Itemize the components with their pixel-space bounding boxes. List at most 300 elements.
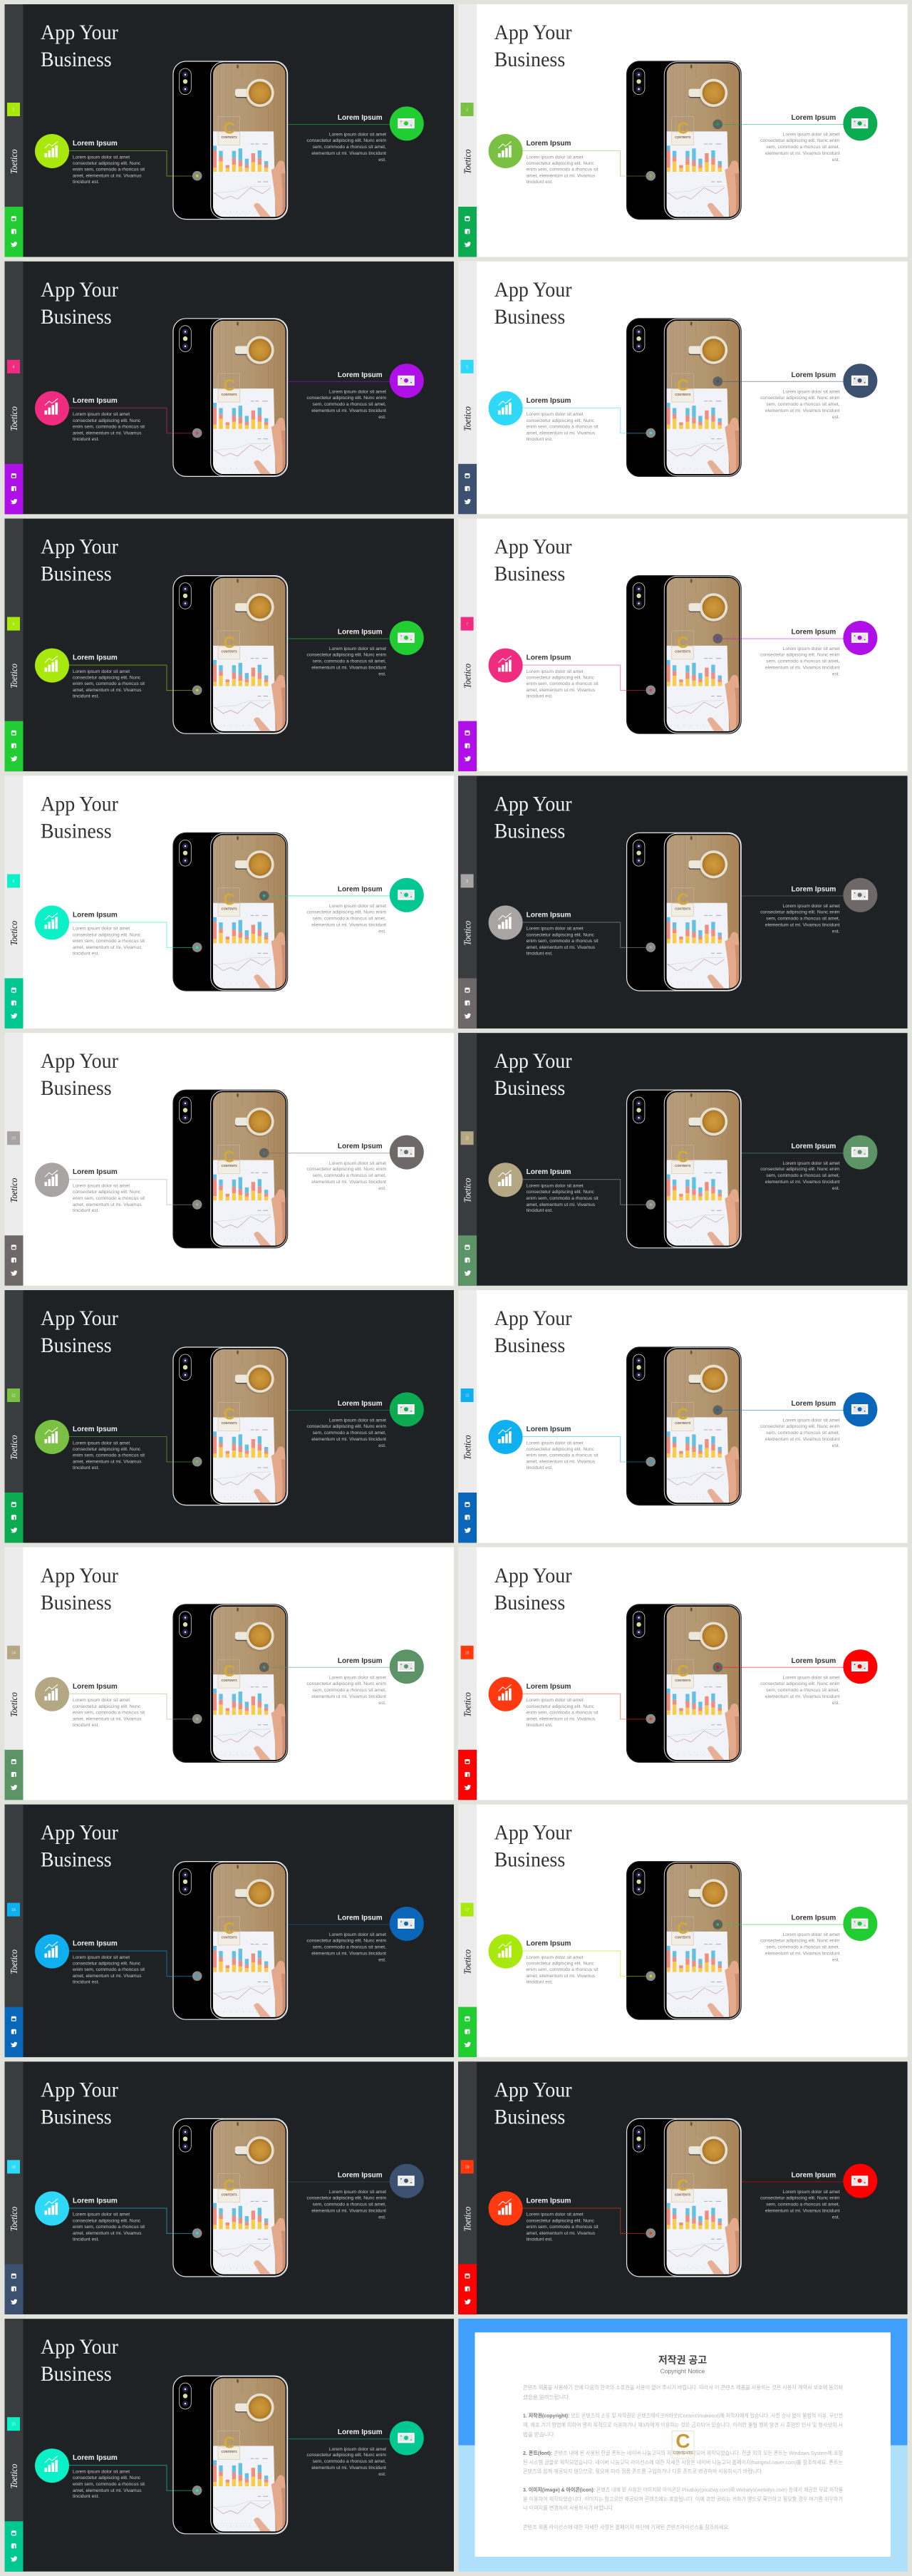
- icon: money circle: [390, 1907, 424, 1941]
- sidebar with page number and brand: 16: [11, 1908, 16, 1912]
- left text: tincidunt est.: [527, 437, 553, 442]
- left text: consectetur adipiscing elit. Nunc: [527, 1447, 595, 1452]
- right connector and hotspot: [712, 1920, 844, 1930]
- right connector and hotspot: [259, 1148, 390, 1158]
- left connector and hotspot: [523, 665, 656, 695]
- left text: amet, elementum ut mi. Vivamus: [73, 1716, 142, 1721]
- left text: tincidunt est.: [527, 1980, 553, 1985]
- social icons: [458, 978, 477, 1029]
- icon: money circle: [843, 878, 877, 912]
- right heading: Lorem Ipsum: [792, 1657, 836, 1665]
- right text: consectetur adipiscing elit. Nunc enim: [307, 396, 386, 401]
- title: Business: [494, 1334, 565, 1357]
- right text: Lorem ipsum dolor sit amet: [329, 1161, 386, 1166]
- left connector and hotspot: [69, 665, 202, 695]
- phone with photo: [627, 833, 741, 991]
- title: Business: [41, 1077, 112, 1100]
- right text: Lorem ipsum dolor sit amet: [783, 1675, 840, 1680]
- slide 8: light, teal: [4, 776, 454, 1029]
- left text: consectetur adipiscing elit. Nunc: [527, 932, 595, 937]
- left text: consectetur adipiscing elit. Nunc: [527, 676, 595, 681]
- left text: amet, elementum ut mi. Vivamus: [527, 945, 596, 950]
- right text: est.: [378, 1958, 386, 1963]
- panel background: [4, 519, 454, 771]
- left text: enim sem, commodo a rhoncus sit: [527, 1196, 598, 1201]
- icon: money circle: [843, 1907, 877, 1941]
- right connector and hotspot: [712, 120, 844, 129]
- right heading: Lorem Ipsum: [338, 2428, 383, 2436]
- sidebar with page number and brand: Toetico: [8, 1435, 19, 1460]
- title: App Your: [494, 1821, 572, 1845]
- title: App Your: [41, 793, 118, 816]
- right text: sem, commodo a rhoncus sit amet,: [766, 145, 840, 150]
- phone with photo: [627, 2118, 741, 2277]
- sidebar with page number and brand: 17: [465, 1908, 470, 1912]
- panel background: [458, 4, 908, 257]
- slide 5: light, cyan and slate: [458, 262, 908, 514]
- gold logo watermark: CONTENTS: [673, 2451, 693, 2456]
- right text: consectetur adipiscing elit. Nunc enim: [307, 1681, 386, 1686]
- right text: elementum ut mi. Vivamus tincidunt: [311, 922, 386, 927]
- left text: amet, elementum ut mi. Vivamus: [527, 174, 596, 179]
- social icons: [458, 1493, 477, 1542]
- title: Business: [41, 1848, 112, 1872]
- sidebar with page number and brand: 20: [11, 2423, 16, 2427]
- right connector: [288, 381, 390, 382]
- phone with photo: [627, 319, 741, 476]
- left heading: Lorem Ipsum: [73, 397, 118, 405]
- icon: money circle: [843, 1649, 877, 1684]
- left connector and hotspot: [69, 2466, 202, 2495]
- slide 4: dark, pink and purple: [4, 262, 454, 514]
- title: App Your: [494, 1307, 572, 1330]
- left text: Lorem ipsum dolor sit amet: [73, 1698, 130, 1703]
- right text: est.: [832, 2215, 840, 2220]
- right text: est.: [832, 1443, 840, 1448]
- title: Business: [494, 1077, 565, 1100]
- sidebar with page number and brand: Toetico: [8, 2463, 19, 2488]
- right text: consectetur adipiscing elit. Nunc enim: [760, 653, 840, 658]
- sidebar with page number and brand: Toetico: [8, 1949, 19, 1974]
- sidebar with page number and brand: Toetico: [462, 1178, 473, 1202]
- left connector and hotspot: [69, 1437, 202, 1467]
- right heading: Lorem Ipsum: [792, 1400, 836, 1408]
- panel background: [4, 2319, 454, 2572]
- right text: consectetur adipiscing elit. Nunc enim: [307, 1167, 386, 1172]
- slide 20: dark, teal: [4, 2319, 454, 2572]
- sidebar with page number and brand: [458, 1547, 477, 1750]
- sidebar with page number and brand: 9: [466, 880, 468, 884]
- panel background: [458, 519, 908, 771]
- right text: elementum ut mi. Vivamus tincidunt: [765, 666, 840, 671]
- sidebar with page number and brand: 5: [466, 365, 468, 369]
- icon: chart circle: [35, 905, 69, 939]
- left connector and hotspot: [69, 151, 202, 181]
- sidebar with page number and brand: Toetico: [462, 920, 473, 945]
- sidebar with page number and brand: 3: [466, 108, 468, 113]
- left heading: Lorem Ipsum: [73, 140, 118, 148]
- phone with photo: [627, 576, 741, 733]
- right connector: [742, 895, 844, 897]
- left connector and hotspot: [69, 2208, 202, 2238]
- sidebar with page number and brand: Toetico: [462, 1692, 473, 1717]
- panel background: [4, 1805, 454, 2057]
- right heading: Lorem Ipsum: [338, 114, 383, 122]
- right text: sem, commodo a rhoncus sit amet,: [766, 659, 840, 664]
- right connector and hotspot: [712, 634, 844, 644]
- left text: tincidunt est.: [73, 951, 99, 956]
- icon: chart circle: [35, 1163, 69, 1197]
- icon: chart circle: [489, 1163, 523, 1197]
- left text: consectetur adipiscing elit. Nunc: [73, 418, 141, 423]
- right heading: Lorem Ipsum: [792, 885, 836, 893]
- right heading: Lorem Ipsum: [338, 371, 383, 379]
- right text: est.: [378, 1186, 386, 1191]
- right text: Lorem ipsum dolor sit amet: [783, 133, 840, 138]
- left text: amet, elementum ut mi. Vivamus: [73, 688, 142, 693]
- left text: Lorem ipsum dolor sit amet: [527, 927, 584, 932]
- left text: consectetur adipiscing elit. Nunc: [527, 1704, 595, 1709]
- sidebar with page number and brand: [4, 1805, 23, 2007]
- left connector and hotspot: [523, 1694, 656, 1724]
- phone with photo: [627, 1862, 741, 2019]
- icon: money circle: [390, 621, 424, 655]
- left text: consectetur adipiscing elit. Nunc: [527, 2218, 595, 2223]
- sidebar with page number and brand: 15: [465, 1651, 470, 1655]
- icon: chart circle: [35, 649, 69, 683]
- left text: tincidunt est.: [73, 1208, 99, 1213]
- sidebar with page number and brand: [4, 776, 23, 978]
- right text: elementum ut mi. Vivamus tincidunt: [311, 666, 386, 671]
- phone with photo: [173, 2118, 288, 2277]
- right text: elementum ut mi. Vivamus tincidunt: [765, 2208, 840, 2213]
- slide 19: dark, orange and red: [458, 2061, 908, 2314]
- panel background: [458, 1033, 908, 1286]
- right connector and hotspot: [712, 1406, 844, 1415]
- right text: est.: [832, 672, 840, 677]
- right connector: [288, 1924, 390, 1925]
- right heading: Lorem Ipsum: [338, 1915, 383, 1922]
- right text: elementum ut mi. Vivamus tincidunt: [311, 2466, 386, 2471]
- right text: Lorem ipsum dolor sit amet: [783, 904, 840, 909]
- panel background: [4, 4, 454, 257]
- right text: elementum ut mi. Vivamus tincidunt: [311, 1952, 386, 1957]
- title: Business: [41, 2106, 112, 2129]
- social icons: [458, 1750, 477, 1800]
- left text: enim sem, commodo a rhoncus sit: [73, 2482, 145, 2487]
- sidebar with page number and brand: Toetico: [462, 149, 473, 174]
- panel background: [4, 776, 454, 1029]
- left text: Lorem ipsum dolor sit amet: [527, 2212, 584, 2217]
- right connector: [288, 124, 390, 125]
- left text: enim sem, commodo a rhoncus sit: [73, 424, 145, 429]
- panel background: [4, 1290, 454, 1542]
- left text: enim sem, commodo a rhoncus sit: [527, 2225, 598, 2230]
- left text: amet, elementum ut mi. Vivamus: [527, 1974, 596, 1979]
- phone with photo: [627, 1604, 741, 1762]
- left connector and hotspot: [523, 1951, 656, 1981]
- icon: money circle: [390, 1135, 424, 1170]
- left text: amet, elementum ut mi. Vivamus: [527, 2231, 596, 2236]
- title: Business: [494, 1848, 565, 1872]
- panel background: [4, 1547, 454, 1800]
- right heading: Lorem Ipsum: [792, 2171, 836, 2179]
- right text: est.: [832, 1701, 840, 1706]
- sidebar with page number and brand: Toetico: [8, 149, 19, 174]
- slide 9: dark, gray: [458, 776, 908, 1029]
- icon: money circle: [390, 1649, 424, 1684]
- right text: sem, commodo a rhoncus sit amet,: [766, 916, 840, 921]
- right text: Lorem ipsum dolor sit amet: [783, 1418, 840, 1423]
- left text: consectetur adipiscing elit. Nunc: [73, 1190, 141, 1195]
- left text: Lorem ipsum dolor sit amet: [527, 1183, 584, 1188]
- social icons: [458, 2007, 477, 2057]
- left text: amet, elementum ut mi. Vivamus: [73, 1974, 142, 1979]
- right text: elementum ut mi. Vivamus tincidunt: [765, 1437, 840, 1442]
- left text: amet, elementum ut mi. Vivamus: [73, 1460, 142, 1465]
- social icons: [4, 978, 23, 1029]
- left text: Lorem ipsum dolor sit amet: [73, 1441, 130, 1446]
- title: Business: [494, 562, 565, 586]
- left text: enim sem, commodo a rhoncus sit: [527, 168, 598, 172]
- right text: Lorem ipsum dolor sit amet: [329, 2190, 386, 2195]
- sidebar with page number and brand: [4, 1547, 23, 1750]
- right text: consectetur adipiscing elit. Nunc enim: [307, 138, 386, 143]
- phone with photo: [627, 1090, 741, 1248]
- left heading: Lorem Ipsum: [73, 911, 118, 919]
- title: Business: [41, 820, 112, 843]
- left text: enim sem, commodo a rhoncus sit: [527, 424, 598, 429]
- right text: elementum ut mi. Vivamus tincidunt: [765, 408, 840, 413]
- panel background: [458, 2061, 908, 2314]
- sidebar with page number and brand: Toetico: [8, 2206, 19, 2231]
- social icons: [4, 464, 23, 514]
- right text: Lorem ipsum dolor sit amet: [783, 1932, 840, 1937]
- right text: elementum ut mi. Vivamus tincidunt: [311, 1437, 386, 1442]
- slide 16: dark, sky and blue: [4, 1805, 454, 2057]
- social icons: [458, 721, 477, 771]
- right text: consectetur adipiscing elit. Nunc enim: [307, 2195, 386, 2200]
- right text: elementum ut mi. Vivamus tincidunt: [311, 408, 386, 413]
- title: Business: [41, 2363, 112, 2386]
- left connector and hotspot: [523, 1180, 656, 1210]
- left text: tincidunt est.: [527, 694, 553, 699]
- right text: sem, commodo a rhoncus sit amet,: [313, 1688, 386, 1693]
- right text: sem, commodo a rhoncus sit amet,: [313, 1431, 386, 1436]
- right text: sem, commodo a rhoncus sit amet,: [313, 2459, 386, 2464]
- icon: money circle: [843, 364, 877, 398]
- right text: consectetur adipiscing elit. Nunc enim: [760, 1424, 840, 1429]
- slide 2: dark, lime and green: [4, 4, 454, 257]
- left connector and hotspot: [69, 1694, 202, 1724]
- left text: tincidunt est.: [527, 1208, 553, 1213]
- left text: Lorem ipsum dolor sit amet: [527, 155, 584, 160]
- left text: consectetur adipiscing elit. Nunc: [527, 1190, 595, 1195]
- left text: tincidunt est.: [73, 1723, 99, 1728]
- title: App Your: [41, 2336, 118, 2359]
- phone with photo: [173, 576, 288, 733]
- left text: enim sem, commodo a rhoncus sit: [527, 681, 598, 686]
- left connector and hotspot: [69, 408, 202, 438]
- left heading: Lorem Ipsum: [527, 1940, 571, 1948]
- left text: Lorem ipsum dolor sit amet: [527, 1441, 584, 1446]
- right connector and hotspot: [259, 891, 390, 901]
- left text: enim sem, commodo a rhoncus sit: [73, 1196, 145, 1201]
- social icons: [458, 1235, 477, 1286]
- sidebar with page number and brand: 18: [11, 2165, 16, 2170]
- title: App Your: [41, 278, 118, 302]
- left text: amet, elementum ut mi. Vivamus: [73, 431, 142, 436]
- left text: amet, elementum ut mi. Vivamus: [527, 1202, 596, 1207]
- icon: chart circle: [489, 905, 523, 939]
- title: Business: [41, 1591, 112, 1614]
- left text: amet, elementum ut mi. Vivamus: [527, 1460, 596, 1465]
- right text: Lorem ipsum dolor sit amet: [783, 389, 840, 394]
- left text: Lorem ipsum dolor sit amet: [73, 2212, 130, 2217]
- right text: sem, commodo a rhoncus sit amet,: [313, 1945, 386, 1950]
- icon: chart circle: [35, 134, 69, 168]
- right text: elementum ut mi. Vivamus tincidunt: [311, 151, 386, 156]
- left heading: Lorem Ipsum: [527, 2197, 571, 2205]
- section 3: image and icon: 나 이미지를 변경하여 사용하시기 바랍니다.: [523, 2504, 614, 2511]
- icon: money circle: [390, 1392, 424, 1426]
- social icons: [4, 1750, 23, 1800]
- left heading: Lorem Ipsum: [527, 1168, 571, 1176]
- left text: tincidunt est.: [73, 694, 99, 699]
- right text: Lorem ipsum dolor sit amet: [329, 1675, 386, 1680]
- right text: est.: [832, 929, 840, 934]
- left text: amet, elementum ut mi. Vivamus: [73, 174, 142, 179]
- sidebar with page number and brand: [458, 262, 477, 464]
- right text: est.: [378, 158, 386, 163]
- sidebar with page number and brand: [4, 1033, 23, 1235]
- right text: consectetur adipiscing elit. Nunc enim: [760, 910, 840, 915]
- panel background: [458, 1547, 908, 1800]
- closing line: 콘텐츠 제품 라이선스에 대한 자세한 사항은 홈페이지 하단에 기재된 콘텐츠라이선스를 참조하세요.: [523, 2523, 730, 2530]
- left text: consectetur adipiscing elit. Nunc: [73, 1962, 141, 1967]
- white card: [475, 2332, 891, 2557]
- phone with photo: [627, 61, 741, 220]
- sidebar with page number and brand: Toetico: [8, 1692, 19, 1717]
- social icons: [458, 2264, 477, 2314]
- phone with photo: [173, 61, 288, 220]
- two-tone blue background: [458, 2319, 908, 2572]
- icon: money circle: [390, 106, 424, 140]
- social icons: [458, 207, 477, 257]
- left connector and hotspot: [523, 922, 656, 952]
- left text: consectetur adipiscing elit. Nunc: [73, 676, 141, 681]
- panel background: [458, 262, 908, 514]
- left text: Lorem ipsum dolor sit amet: [73, 412, 130, 417]
- title: Business: [494, 1591, 565, 1614]
- right heading: Lorem Ipsum: [338, 1143, 383, 1150]
- right text: est.: [832, 1186, 840, 1191]
- icon: money circle: [843, 2164, 877, 2198]
- right heading: Lorem Ipsum: [792, 629, 836, 637]
- left heading: Lorem Ipsum: [73, 1168, 118, 1176]
- icon: chart circle: [35, 1934, 69, 1969]
- slide 11: dark, tan and sage: [458, 1033, 908, 1286]
- left heading: Lorem Ipsum: [73, 2197, 118, 2205]
- sidebar with page number and brand: 2: [13, 108, 15, 113]
- phone with photo: [173, 1862, 288, 2019]
- sidebar with page number and brand: [4, 4, 23, 207]
- sidebar with page number and brand: [458, 4, 477, 207]
- icon: chart circle: [35, 2448, 69, 2483]
- left text: enim sem, commodo a rhoncus sit: [73, 1967, 145, 1972]
- icon: money circle: [843, 1135, 877, 1170]
- left heading: Lorem Ipsum: [527, 1426, 571, 1433]
- sidebar with page number and brand: 8: [13, 880, 15, 884]
- left text: consectetur adipiscing elit. Nunc: [73, 2475, 141, 2480]
- icon: chart circle: [489, 1934, 523, 1969]
- right connector: [742, 2181, 844, 2183]
- left text: tincidunt est.: [73, 1980, 99, 1985]
- left text: tincidunt est.: [527, 2237, 553, 2242]
- left text: enim sem, commodo a rhoncus sit: [73, 939, 145, 944]
- left text: Lorem ipsum dolor sit amet: [73, 927, 130, 932]
- left text: amet, elementum ut mi. Vivamus: [73, 2488, 142, 2493]
- section 2: font: 콘텐츠의 함께 제공되지 않으므로, 필요에 따라 정품 폰트를 구입하거나 다른 폰트로 변경하여 사용하시기 바랍니다.: [523, 2468, 763, 2475]
- sidebar with page number and brand: [458, 2061, 477, 2264]
- left text: Lorem ipsum dolor sit amet: [73, 1955, 130, 1960]
- right text: est.: [832, 158, 840, 163]
- left text: tincidunt est.: [527, 180, 553, 185]
- right connector: [288, 2438, 390, 2440]
- right text: sem, commodo a rhoncus sit amet,: [766, 1173, 840, 1178]
- sidebar with page number and brand: [458, 1290, 477, 1493]
- right text: consectetur adipiscing elit. Nunc enim: [307, 1939, 386, 1944]
- left text: amet, elementum ut mi. Vivamus: [73, 2231, 142, 2236]
- social icons: [4, 2264, 23, 2314]
- right text: Lorem ipsum dolor sit amet: [329, 1418, 386, 1423]
- slide 17: light, lime and green: [458, 1805, 908, 2057]
- sidebar with page number and brand: 14: [11, 1651, 16, 1655]
- icon: chart circle: [489, 649, 523, 683]
- left text: amet, elementum ut mi. Vivamus: [73, 945, 142, 950]
- right connector: [288, 1410, 390, 1411]
- title: App Your: [41, 1307, 118, 1330]
- slide 10: light, gray: [4, 1033, 454, 1286]
- sidebar with page number and brand: 11: [465, 1137, 469, 1141]
- right heading: Lorem Ipsum: [338, 1657, 383, 1665]
- title: App Your: [494, 278, 572, 302]
- right text: Lorem ipsum dolor sit amet: [329, 646, 386, 651]
- right text: elementum ut mi. Vivamus tincidunt: [765, 1952, 840, 1957]
- right text: consectetur adipiscing elit. Nunc enim: [760, 1167, 840, 1172]
- panel background: [4, 1033, 454, 1286]
- sidebar with page number and brand: [458, 519, 477, 721]
- left heading: Lorem Ipsum: [527, 911, 571, 919]
- right text: est.: [378, 1701, 386, 1706]
- left text: tincidunt est.: [73, 2494, 99, 2499]
- right text: est.: [378, 415, 386, 420]
- phone with photo: [173, 1604, 288, 1762]
- slide 12: dark, green: [4, 1290, 454, 1542]
- icon: chart circle: [489, 1677, 523, 1711]
- left text: consectetur adipiscing elit. Nunc: [73, 932, 141, 937]
- title: App Your: [494, 1564, 572, 1587]
- left text: consectetur adipiscing elit. Nunc: [527, 161, 595, 166]
- sidebar with page number and brand: 12: [11, 1394, 16, 1398]
- section 2: font: 2. 폰트(font): 콘텐츠 내에 된 사용된 한글 폰트는 네이버 나눔고딕의 저작물로 제작되어 제작되었습니다. 한글 외의 모든 폰트는 Windows System에 포함: [523, 2450, 861, 2456]
- icon: chart circle: [489, 134, 523, 168]
- social icons: [4, 2007, 23, 2057]
- right text: sem, commodo a rhoncus sit amet,: [313, 2202, 386, 2207]
- title: Business: [494, 2106, 565, 2129]
- right connector and hotspot: [712, 376, 844, 386]
- icon: money circle: [843, 621, 877, 655]
